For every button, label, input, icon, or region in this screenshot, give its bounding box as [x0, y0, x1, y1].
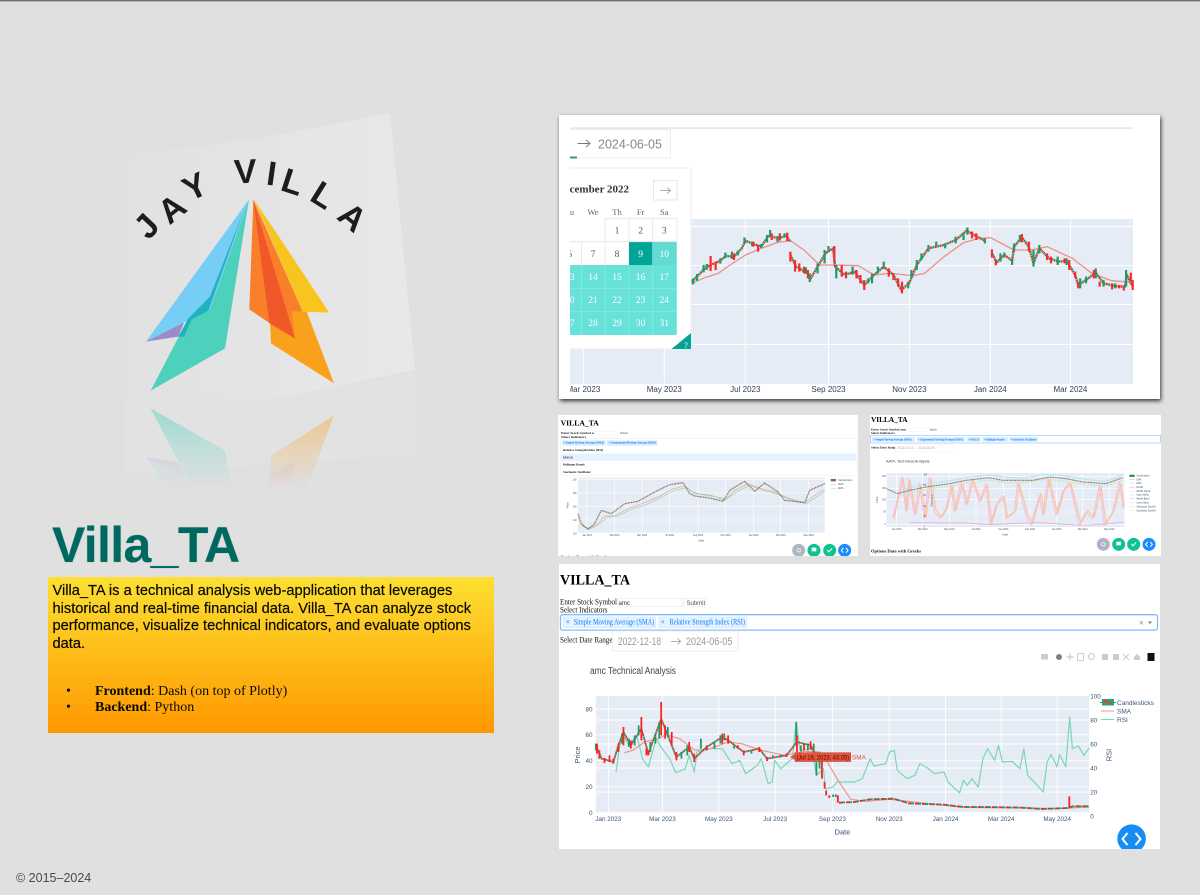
description text: Villa_TA is a technical analysis web-application that leverages: [52, 583, 452, 599]
SMA line: [691, 238, 1133, 283]
calendar selected range: [629, 242, 653, 265]
chart legend: SMA: [1117, 708, 1132, 716]
chart legend: Lower Band: [1136, 501, 1149, 504]
chart legend: SMA: [1136, 478, 1142, 481]
chart axes: 100: [923, 474, 928, 476]
form: Enter Stock Symbol amc: [561, 431, 598, 435]
chart legend: EMA: [1136, 482, 1142, 485]
form: Select Indicators: [871, 431, 895, 435]
footer copyright: © 2015–2024: [16, 871, 91, 885]
indicator selector: Simple Moving Average (SMA): [574, 618, 654, 626]
logo backdrop: [125, 113, 415, 398]
form: Select Indicators: [561, 435, 587, 439]
chart axes: 100: [1090, 694, 1101, 700]
stochastic spikes: [893, 477, 1123, 525]
description text: [52, 583, 472, 652]
weekday headers: Fr: [637, 207, 645, 217]
calendar popup: 23: [636, 295, 646, 306]
calendar dates: 1: [615, 226, 620, 236]
indicator selector: × Exponential Moving Average (EMA): [918, 438, 963, 441]
description text: data.: [52, 636, 85, 652]
green candles: [693, 227, 1126, 288]
chart axes: Price: [565, 502, 569, 508]
green candles: [596, 722, 836, 797]
chart axes: [565, 480, 814, 542]
hover tooltip: (Jul 19, 2023, 43.05): [796, 754, 849, 762]
chart axes: Jan 2024: [933, 816, 959, 823]
panel: amc technical analysis: [559, 564, 1160, 849]
hover tooltip: [790, 753, 867, 762]
chart axes: Date: [835, 828, 850, 836]
chart axes: 60: [923, 495, 927, 497]
panel: full indicator chart: [870, 415, 1161, 556]
logo wordmark: I: [264, 155, 279, 194]
SMA line: [624, 735, 1089, 809]
indicator selector: × MACD: [968, 438, 979, 441]
indicator chart: [887, 473, 1124, 527]
chart axes: Jan 2023: [595, 816, 622, 823]
chart axes: May 2024: [804, 535, 814, 537]
hover tooltip: SMA: [852, 754, 867, 762]
open indicator dropdown: × Simple Moving Average (SMA): [563, 441, 604, 445]
chart legend: Candlesticks: [838, 479, 853, 482]
candle filler: [596, 719, 820, 762]
logo wordmark: Y: [177, 165, 214, 209]
app heading: VILLA_TA: [561, 418, 599, 427]
chart toolbar icons: [1041, 653, 1154, 661]
logo: Jay Villa paper plane with reflection: [127, 113, 415, 482]
red candles: [597, 702, 1069, 808]
chart axes: Jul 2023: [763, 816, 788, 823]
logo wordmark: L: [277, 161, 308, 204]
calendar dates: 3: [662, 226, 667, 236]
x axis labels: [570, 386, 1088, 394]
stock symbol form: Select Indicators: [560, 605, 608, 615]
date range input: 2024-06-05: [598, 138, 662, 152]
stock symbol form: [560, 596, 706, 615]
line and candlestick chart: [578, 478, 825, 533]
description text: historical and real-time financial data. Villa_TA can analyze stock: [52, 601, 471, 617]
panel: candlestick chart with date picker: [559, 115, 1160, 399]
chart axes: Date: [1003, 533, 1009, 537]
chart legend: SMA: [838, 483, 844, 486]
chart axes: 80: [585, 706, 593, 714]
floating action buttons: [792, 544, 851, 557]
chart axes: May 2024: [1043, 816, 1072, 823]
form: Select Date Range: [871, 445, 897, 449]
open indicator dropdown: MACD: [563, 455, 574, 459]
chart axes: Mar 2023: [918, 528, 928, 531]
RSI line: [616, 717, 1089, 793]
indicator selector: [560, 615, 1158, 630]
date range: 2024-06-05: [686, 636, 733, 648]
x axis labels: May 2023: [647, 385, 682, 394]
chart axes: Mar 2023: [649, 816, 676, 823]
chart legend: [831, 479, 853, 490]
chart axes: 200: [882, 476, 887, 478]
chart axes: Nov 2023: [721, 535, 731, 537]
app heading: VILLA_TA: [871, 415, 908, 424]
logo wordmark: A: [151, 187, 194, 232]
technology list: Frontend: Dash (on top of Plotly): [95, 684, 287, 698]
chart legend: Stochastic Stoch%: [1136, 509, 1156, 512]
calendar popup: ?: [684, 341, 688, 350]
chart axes: 60: [1090, 742, 1098, 748]
calendar dates: 8: [615, 249, 620, 260]
chart legend: EMA: [838, 487, 844, 490]
weekday headers: [570, 209, 668, 215]
date range: 2022-12-18: [618, 636, 661, 648]
chart axes: Date: [699, 538, 705, 542]
stock symbol form: Enter Stock Symbol: [560, 596, 618, 606]
chart axes: Mar 2024: [776, 534, 786, 537]
next month button: [654, 180, 677, 200]
plane: left wing: [146, 199, 334, 391]
chart axes: [875, 474, 1115, 537]
chart legend: [1129, 475, 1156, 512]
chart axes: Sep 2023: [998, 529, 1009, 531]
indicator selector: × Bollinger Bands: [984, 438, 1005, 441]
indicator selector: Relative Strength Index (RSI): [670, 618, 745, 626]
chart legend: MACD: [1136, 486, 1144, 489]
chart axes: 0: [1090, 814, 1094, 820]
calendar popup: 28: [588, 318, 598, 329]
x axis labels: Mar 2024: [1054, 385, 1088, 394]
indicator selector: × Stochastic Oscillator: [1010, 438, 1037, 441]
chart axes: 60: [585, 732, 593, 739]
chart axes: May 2023: [705, 816, 733, 823]
calendar popup: 16: [636, 272, 646, 283]
calendar popup: 15: [612, 272, 622, 283]
description panel: [48, 577, 494, 733]
chart axes: Price: [573, 746, 582, 764]
indicator selector: ×: [660, 618, 665, 626]
indicator selector: [870, 435, 1160, 443]
chart axes: 80: [923, 485, 927, 487]
calendar popup: 17: [660, 272, 669, 283]
chart title: AAPL Technical Analysis: [886, 458, 930, 463]
chart axes: 50: [883, 512, 887, 514]
calendar dates: 7: [591, 249, 596, 260]
date range: [895, 444, 953, 452]
chart axes: 40: [923, 506, 927, 508]
open indicator dropdown: × Exponential Moving Average (EMA): [608, 441, 656, 445]
chart axes: [573, 694, 1114, 836]
chart axes: May 2023: [944, 529, 955, 531]
chart axes: 40: [1090, 766, 1098, 772]
stock symbol form: Submit: [686, 601, 706, 607]
calendar popup: 13: [565, 272, 575, 283]
indicator selector: × Simple Moving Average (SMA): [873, 438, 912, 441]
chart axes: Mar 2023: [610, 534, 620, 537]
help corner: [672, 333, 691, 349]
title: Villa_TA: [52, 517, 239, 573]
app heading: VILLA_TA: [560, 572, 630, 588]
chart axes: Nov 2023: [1025, 529, 1036, 531]
chart axes: 20: [1090, 790, 1098, 796]
weekday headers: Tu: [565, 207, 575, 217]
calendar popup: 21: [588, 295, 598, 306]
open indicator dropdown: Bollinger Bands: [563, 463, 585, 467]
chart legend: RSI: [1117, 717, 1128, 724]
chart axes: May 2023: [637, 535, 648, 537]
date range: Select Date Range: [560, 635, 613, 645]
calendar dates: [570, 227, 666, 257]
chart axes: 80: [1090, 718, 1098, 724]
x axis labels: Jan 2024: [974, 385, 1007, 394]
section heading: Options Data with Greeks: [871, 548, 921, 553]
dual-axis chart: [596, 696, 1089, 813]
bands: [899, 474, 1123, 490]
chart axes: 140: [573, 520, 577, 522]
indicator selector: ×: [1139, 618, 1144, 628]
calendar popup: 20: [565, 295, 575, 306]
chart legend: Middle Band: [1136, 498, 1150, 500]
chart axes: 0: [885, 524, 887, 526]
chart axes: May 2024: [1104, 529, 1115, 531]
chart axes: 40: [585, 758, 593, 765]
top edge line: [0, 0, 1200, 2]
chart axes: Sep 2023: [693, 535, 704, 537]
weekday headers: Sa: [660, 207, 669, 217]
logo wordmark: V: [233, 152, 258, 192]
description text: performance, visualize technical indicators, and evaluate options: [52, 618, 471, 634]
date range: [560, 631, 738, 651]
chart legend: Upper Band: [1136, 494, 1149, 497]
chart axes: Jan 2023: [582, 535, 592, 537]
open indicator dropdown: [561, 439, 857, 475]
chart axes: 0: [589, 810, 593, 817]
technology list: Backend: Python: [95, 700, 194, 715]
chart axes: RSI: [1104, 749, 1114, 761]
form: Enter Stock Symbol amc: [871, 428, 907, 432]
open indicator dropdown: Relative Strength Index (RSI): [563, 448, 603, 452]
chart axes: 0: [923, 527, 925, 529]
technology list: [66, 684, 287, 715]
panel: dropdown with SMA and EMA chart: [558, 415, 858, 556]
chart axes: 160: [573, 506, 577, 508]
chart axes: Mar 2024: [988, 816, 1015, 823]
calendar popup: 10: [660, 249, 669, 260]
chart axes: Nov 2023: [876, 816, 903, 823]
chart axes: Jul 2023: [972, 529, 981, 531]
chart legend: [1100, 699, 1155, 724]
date range input: [560, 130, 670, 158]
candles: [887, 477, 1123, 494]
technology list: •: [66, 684, 71, 698]
chart axes: Mar 2024: [1078, 528, 1088, 531]
calendar dates: 2: [638, 226, 643, 236]
chart legend: Candlesticks: [1117, 700, 1155, 707]
stock symbol form: amc: [618, 601, 630, 607]
chart title: amc Technical Analysis: [590, 666, 676, 677]
floating code button: [1117, 824, 1146, 853]
chart axes: 20: [923, 516, 927, 518]
indicator selector: ×: [566, 618, 570, 626]
weekday headers: Th: [612, 207, 622, 217]
technology list: •: [66, 700, 71, 715]
chart axes: Jan 2023: [892, 529, 902, 531]
form: [561, 431, 598, 439]
calendar popup: 30: [636, 318, 646, 329]
chart axes: Sep 2023: [819, 816, 846, 823]
chart legend: Stochastic Stoch%: [1136, 505, 1156, 508]
chart axes: Jan 2024: [1052, 529, 1062, 531]
x axis labels: Nov 2023: [892, 385, 927, 394]
red candles: [711, 232, 1133, 293]
calendar popup: 9: [638, 249, 643, 260]
calendar popup: [557, 168, 691, 350]
calendar popup: 27: [565, 318, 575, 329]
panel: full indicator chart: Submit: [929, 429, 937, 432]
chart axes: 20: [585, 784, 593, 791]
chart axes: 150: [882, 488, 887, 490]
panel: dropdown with SMA and EMA chart: Submit: [620, 432, 628, 435]
top rule: [570, 128, 1133, 129]
x axis labels: Mar 2023: [567, 385, 601, 394]
chart axes: Jul 2023: [665, 535, 675, 537]
open indicator dropdown: Stochastic Oscillator: [563, 470, 591, 474]
weekday headers: We: [587, 207, 599, 217]
chart axes: Stochastic: [929, 494, 933, 506]
chart plot area: [557, 130, 1133, 394]
calendar popup: 31: [660, 318, 669, 329]
candle filler: [691, 235, 790, 282]
date range: 2022-12-12 → 2024-06-05: [897, 446, 935, 450]
chart axes: 100: [882, 499, 887, 501]
logo wordmark: A: [330, 195, 374, 240]
logo wordmark: L: [304, 174, 342, 217]
x axis labels: Jul 2023: [730, 385, 761, 394]
chart axes: 120: [573, 534, 577, 536]
chart axes: 200: [573, 480, 577, 482]
chart axes: Jan 2024: [749, 535, 759, 537]
calendar dates: 6: [567, 249, 572, 260]
x axis labels: Sep 2023: [811, 385, 846, 394]
calendar popup: 24: [660, 295, 669, 306]
chart axes: 180: [573, 493, 577, 495]
reflection backdrop: [125, 372, 415, 475]
logo wordmark: [127, 152, 374, 246]
calendar popup: 22: [612, 295, 622, 306]
floating action buttons: [1097, 538, 1156, 551]
calendar popup: 29: [612, 318, 622, 329]
chart legend: Candlesticks: [1136, 475, 1150, 478]
chart legend: MACD Signal: [1136, 490, 1151, 493]
logo wordmark: J: [127, 207, 167, 246]
chart axes: Price: [875, 496, 879, 503]
calendar popup: 14: [588, 272, 598, 283]
form: [871, 428, 907, 449]
logo reflection: [146, 408, 334, 482]
